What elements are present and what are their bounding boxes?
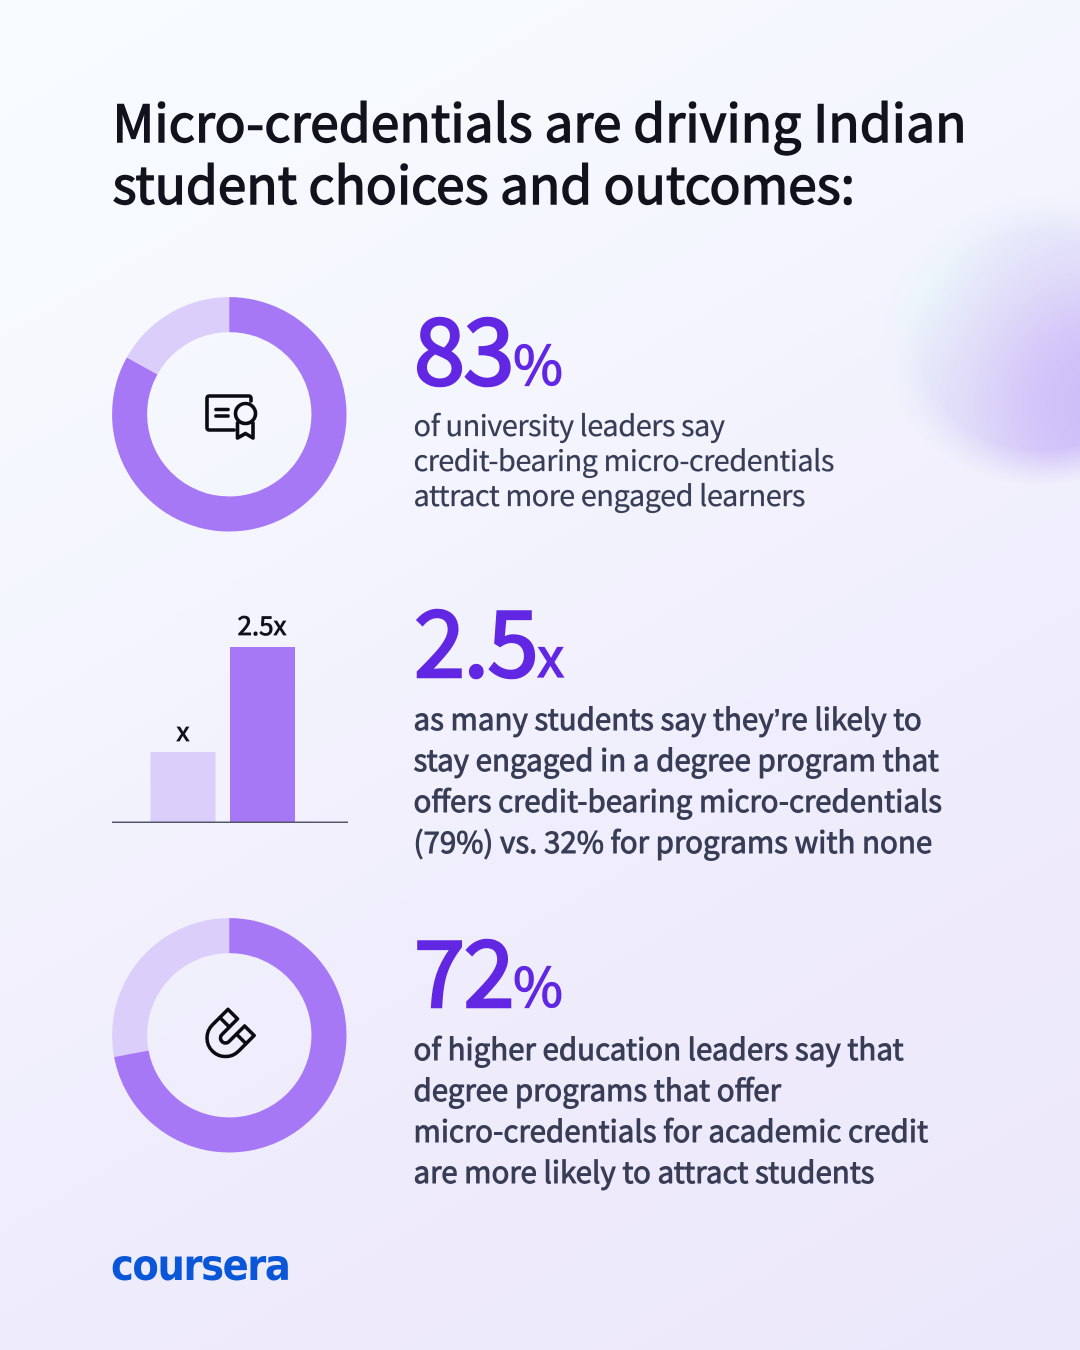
text: stat 2 description: offers credit-bearing micro-credentials <box>414 779 942 821</box>
text: stat 2 description <box>414 697 942 862</box>
stat: 2.5x: 2.5x <box>414 571 563 704</box>
text: stat 2 description: as many students say they’re likely to <box>414 697 922 739</box>
title: student choices and outcomes: <box>112 144 855 219</box>
icon: certificate <box>207 396 256 438</box>
text: stat 3 description: are more likely to attract students <box>414 1150 874 1192</box>
text: stat 1 description: attract more engaged learners <box>414 473 805 515</box>
title <box>112 82 967 219</box>
text: stat 3 description: micro-credentials for academic credit <box>414 1109 928 1151</box>
chart: 83% donut <box>112 297 346 532</box>
text: stat 1 description: of university leaders say <box>414 403 724 445</box>
chart: bar comparison: x <box>177 712 190 749</box>
text: stat 1 description <box>414 403 834 515</box>
chart: 72% donut <box>112 918 346 1152</box>
title: Micro-credentials are driving Indian <box>112 82 967 157</box>
chart: bar comparison <box>112 606 348 823</box>
chart: bar comparison: 2.5x <box>237 606 287 643</box>
text: stat 2 description: (79%) vs. 32% for programs with none <box>414 820 932 862</box>
text: stat 2 description: stay engaged in a degree program that <box>414 738 939 780</box>
stat: 72%: 72% <box>414 901 561 1034</box>
text: stat 3 description: of higher education leaders say that <box>414 1027 904 1069</box>
text: stat 1 description: credit-bearing micro-credentials <box>414 438 834 480</box>
icon: magnet <box>199 1009 254 1064</box>
logo: Coursera: coursera <box>111 1242 289 1291</box>
text: stat 3 description: degree programs that offer <box>414 1068 781 1110</box>
stat: 83%: 83% <box>414 279 561 412</box>
text: stat 3 description <box>414 1027 928 1192</box>
